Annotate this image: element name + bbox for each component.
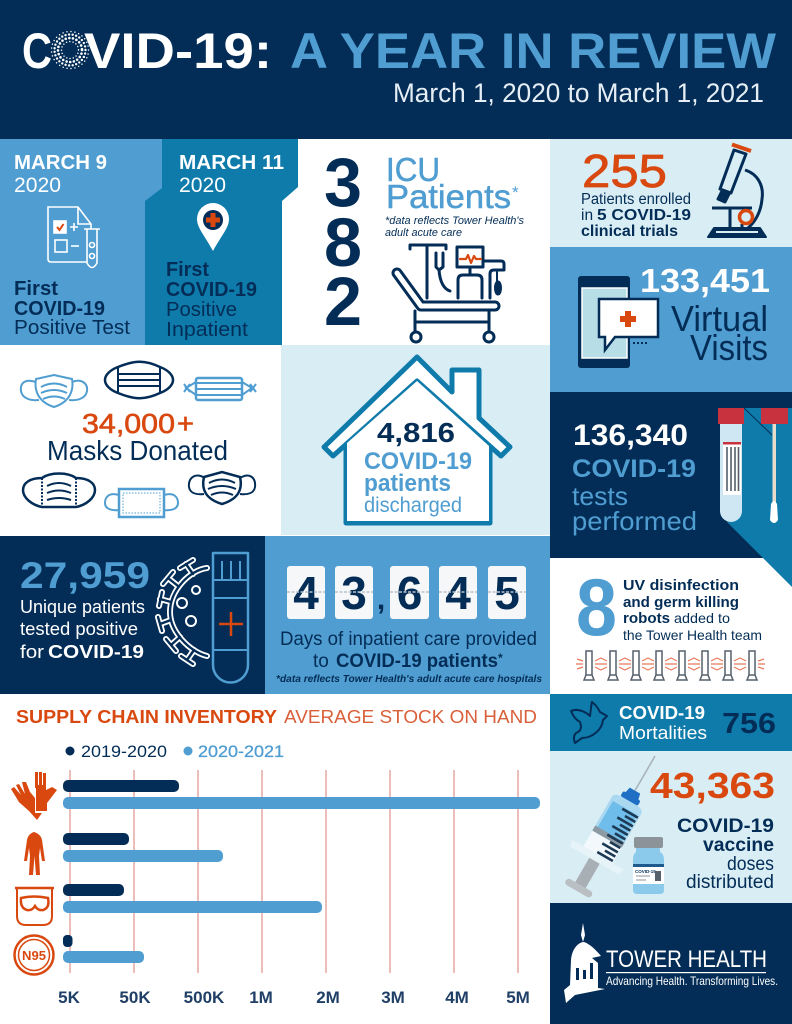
- panel: March 11: 2020: [179, 174, 226, 197]
- icon: masks bottom row: [23, 472, 255, 517]
- icon: UV robot towers: [576, 651, 765, 680]
- axis labels: 4M: [445, 988, 469, 1007]
- title: [22, 23, 777, 79]
- panel: tested positive: Unique patients: [20, 597, 145, 617]
- panel: ICU patients: 8: [324, 204, 362, 281]
- heading: [16, 707, 537, 727]
- panel: patients discharged: patients: [364, 470, 451, 497]
- icon: ICU bed: [397, 245, 504, 342]
- panel: days of inpatient care: *data reflects Tower Health's adult acute care hospitals: [276, 674, 542, 685]
- legend: [66, 742, 284, 761]
- flip counter: 6: [397, 567, 422, 619]
- callout: masks count: [47, 408, 228, 466]
- axis labels: [58, 988, 530, 1007]
- panel: ICU patients: [324, 144, 524, 342]
- flip counter: 5: [494, 567, 520, 619]
- panel: vaccine doses: distributed: [686, 871, 774, 893]
- icon: gloves: [11, 772, 57, 820]
- panel: vaccine doses: [550, 741, 792, 906]
- panel: March 11: First: [166, 259, 209, 281]
- icon: virus: [158, 560, 207, 664]
- panel: clinical trials: 255: [582, 145, 667, 197]
- panel: tests performed: performed: [572, 506, 697, 536]
- flip counter: 4: [445, 567, 471, 619]
- panel: clinical trials: in: [581, 207, 593, 224]
- panel: days of inpatient care: Days of inpatient care provided: [280, 629, 537, 650]
- icon: dove: [571, 702, 607, 743]
- flip counter: ,: [377, 583, 385, 616]
- title: VID-19:: [84, 23, 272, 79]
- icon: microscope: [708, 144, 766, 237]
- panel: March 11: MARCH 11: [179, 152, 284, 174]
- panel: days of inpatient care: COVID-19 patients: [336, 651, 498, 672]
- icon: masks top row: [21, 362, 256, 407]
- panel: UV robots: [576, 563, 765, 680]
- panel: ICU patients: adult acute care: [385, 227, 462, 239]
- panel: patients discharged: 4,816: [377, 417, 455, 448]
- panel: UV robots: the Tower Health team: [623, 627, 762, 643]
- panel: clinical trials: clinical trials: [581, 223, 678, 240]
- panel: ICU patients: ICU: [386, 151, 440, 188]
- panel: March 11: [145, 139, 298, 345]
- panel: March 9: 2020: [14, 174, 61, 197]
- icon: test checklist: [48, 207, 100, 268]
- panel: ICU patients: *: [512, 183, 519, 202]
- legend: 2020-2021: [198, 742, 284, 761]
- flip counter: 3: [341, 567, 367, 619]
- panel: clinical trials: Patients enrolled: [581, 191, 691, 208]
- icon: N95 mask: N95: [22, 948, 46, 963]
- panel: virtual visits: Virtual: [671, 298, 768, 339]
- panel: tests performed: [550, 392, 792, 587]
- panel: masks donated: [21, 362, 256, 517]
- panel: patients discharged: [281, 345, 550, 535]
- panel: March 9: [0, 139, 165, 345]
- icon: map pin: [197, 203, 229, 251]
- callout: masks count: Masks Donated: [47, 435, 228, 466]
- flip counter: 4: [293, 567, 319, 619]
- panel: supply chain chart: [11, 707, 540, 1007]
- panel: UV robots: UV disinfection: [623, 578, 739, 594]
- panel: ICU patients: *data reflects Tower Health's: [385, 215, 524, 227]
- legend: 2019-2020: [81, 742, 167, 761]
- bar chart: [63, 780, 540, 963]
- panel: March 11: Inpatient: [166, 319, 248, 341]
- panel: vaccine doses: vaccine: [703, 834, 774, 856]
- panel: March 9: Positive Test: [14, 317, 130, 339]
- icon: swab: [761, 408, 788, 523]
- panel: patients discharged: COVID-19: [364, 448, 472, 475]
- panel: UV robots: 8: [576, 563, 617, 653]
- callout: masks count: +: [177, 408, 194, 439]
- icon: phone with chat bubble: [578, 276, 658, 368]
- panel: tested positive: [0, 536, 265, 694]
- panel: March 11: Positive: [166, 299, 237, 321]
- panel: virtual visits: 133,451: [640, 262, 770, 299]
- panel: mortalities: COVID-19: [619, 703, 705, 723]
- icon: blood tube: [213, 553, 248, 682]
- panel: tested positive: COVID-19: [48, 642, 144, 662]
- panel: tested positive: 27,959: [20, 555, 150, 596]
- icon: test tube: [718, 408, 744, 522]
- heading: SUPPLY CHAIN INVENTORY: [16, 707, 277, 727]
- heading: AVERAGE STOCK ON HAND: [284, 707, 537, 727]
- panel: vaccine doses: 43,363: [650, 765, 775, 806]
- panel: days of inpatient care: to: [313, 651, 329, 672]
- axis labels: 1M: [249, 988, 273, 1007]
- panel: virtual visits: [550, 247, 792, 392]
- panel: ICU patients: Patients: [386, 178, 511, 215]
- icon: N95 mask: [14, 936, 54, 974]
- subtitle: March 1, 2020 to March 1, 2021: [393, 78, 764, 108]
- panel: UV robots: robots: [623, 611, 670, 627]
- panel: ICU patients: 3: [324, 144, 362, 221]
- panel: March 9: COVID-19: [14, 298, 105, 320]
- icon: vaccine vial: COVID-19: [635, 869, 656, 874]
- panel: UV robots: and germ killing: [623, 595, 739, 611]
- callout: masks count: 34,000: [82, 408, 175, 439]
- panel: March 9: First: [14, 278, 58, 300]
- flip counter: [287, 566, 526, 619]
- panel: virtual visits: Visits: [690, 327, 768, 368]
- panel: Tower Health logo: [550, 903, 792, 1024]
- icon: face shield: [15, 888, 54, 925]
- title: C: [22, 23, 52, 79]
- panel: ICU patients: 2: [324, 263, 362, 340]
- panel: patients discharged: discharged: [364, 494, 462, 517]
- panel: tested positive: tested positive: [20, 619, 138, 639]
- panel: clinical trials: [550, 139, 792, 247]
- panel: UV robots: added to: [674, 610, 730, 626]
- panel: mortalities: Mortalities: [619, 723, 707, 743]
- icon: syringe: [551, 741, 681, 906]
- title: A YEAR IN REVIEW: [290, 23, 777, 79]
- icon: tower: [564, 923, 605, 1003]
- panel: mortalities: [550, 694, 792, 751]
- axis labels: 3M: [381, 988, 405, 1007]
- axis labels: 50K: [119, 988, 151, 1007]
- panel: tests performed: COVID-19: [572, 455, 696, 483]
- panel: mortalities: 756: [722, 708, 776, 740]
- panel: tests performed: 136,340: [573, 419, 688, 452]
- axis labels: 500K: [184, 988, 225, 1007]
- panel: tested positive: for: [20, 642, 44, 662]
- panel: clinical trials: 5 COVID-19: [597, 207, 691, 224]
- axis labels: 5K: [58, 988, 81, 1007]
- panel: Tower Health logo: TOWER HEALTH: [606, 946, 767, 973]
- panel: days of inpatient care: [265, 536, 550, 694]
- axis labels: 2M: [316, 988, 340, 1007]
- panel: header: [0, 0, 792, 139]
- panel: days of inpatient care: *: [498, 651, 503, 665]
- panel: vaccine doses: doses: [727, 853, 774, 875]
- panel: tests performed: tests: [572, 481, 628, 511]
- panel: March 9: MARCH 9: [14, 152, 107, 174]
- panel: vaccine doses: COVID-19: [677, 815, 774, 837]
- icon: house: [324, 357, 510, 523]
- panel: March 11: COVID-19: [166, 279, 257, 301]
- axis labels: 5M: [506, 988, 530, 1007]
- icon: vaccine vial: [633, 837, 664, 894]
- icon: protective suit: [24, 832, 45, 875]
